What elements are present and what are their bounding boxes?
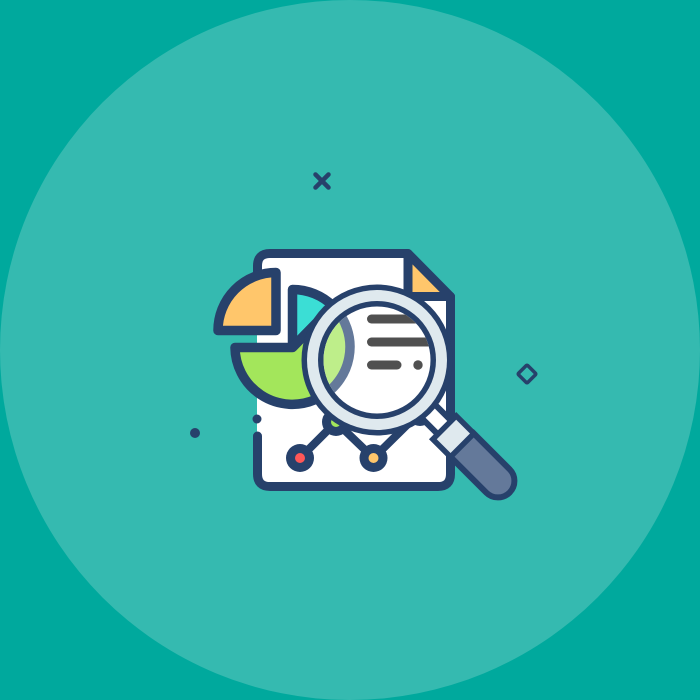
document [252,254,450,486]
document outline [258,254,450,486]
outline dot [252,414,262,424]
icon: small cross [316,174,328,188]
chart node: green [322,408,350,436]
neck [421,404,452,435]
grip [449,432,521,504]
icon: small dot [190,428,200,438]
lens contents [324,314,429,392]
lens ring [302,284,452,436]
pie slice: green [235,306,350,404]
chart node: hidden [406,398,434,426]
document fold [408,254,450,296]
pie slice: orange [218,272,276,330]
text line 1 [367,314,416,324]
document fold outline [408,254,450,296]
chart node: red [286,444,314,472]
handle [416,399,521,504]
chart lines [300,420,412,458]
document page fill [257,254,450,486]
pie slice: cyan [292,290,333,348]
chart node: orange [360,444,388,472]
text dot [413,360,423,370]
icon: small diamond [518,365,536,383]
collar [433,416,474,457]
magnified pie [324,316,355,392]
line chart [286,398,434,472]
text line 3 [372,360,397,370]
magnifying glass [302,284,518,500]
pie chart [218,272,350,404]
text line 2 [372,338,440,346]
